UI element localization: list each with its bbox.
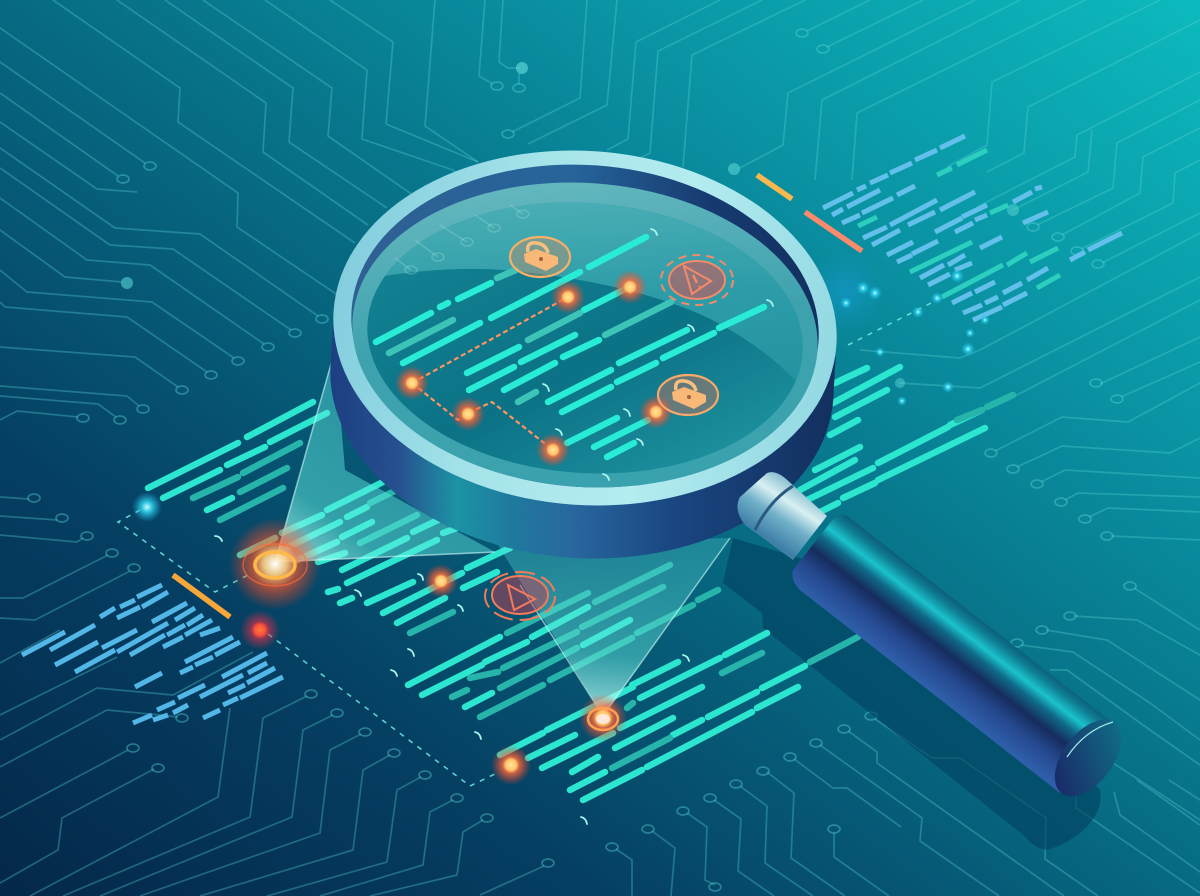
document frame: dashed outline bbox=[118, 296, 945, 786]
floor nodes bbox=[132, 492, 627, 785]
bracket marks inside lens bbox=[543, 229, 773, 480]
icon: padlock lower bbox=[658, 375, 718, 415]
dim code lines inside lens bbox=[389, 270, 671, 402]
blue code lines, lower left bbox=[22, 585, 283, 723]
dashed orange connectors bbox=[412, 297, 568, 450]
lens rim bbox=[321, 134, 849, 522]
lens barrel bbox=[318, 151, 848, 575]
handle bbox=[792, 515, 1134, 808]
orange and red accent dashes bbox=[173, 175, 862, 617]
lens inner wall bbox=[340, 149, 830, 503]
lens glass bbox=[367, 202, 803, 474]
cyan sparkle particles bbox=[805, 252, 990, 406]
teal code lines, upper right bbox=[858, 150, 1060, 297]
lens nodes bbox=[395, 270, 673, 467]
handle and lens shadow on the board bbox=[723, 538, 1101, 850]
bright code lines inside lens bbox=[376, 237, 764, 457]
handle collar bbox=[737, 472, 827, 560]
dim code lines on board bbox=[193, 395, 1013, 768]
bright code lines on board bbox=[148, 367, 985, 800]
icon: warning triangle bbox=[661, 255, 733, 305]
light beams bbox=[275, 350, 730, 716]
icon: padlock top bbox=[510, 237, 570, 277]
small bracket marks bbox=[215, 536, 689, 824]
lens glass bevel bbox=[342, 167, 828, 503]
faint traces in lens bbox=[395, 205, 529, 274]
floor warning icon bbox=[485, 572, 555, 620]
magnifying glass bbox=[318, 134, 1134, 808]
blue code lines, upper right bbox=[823, 136, 1122, 320]
